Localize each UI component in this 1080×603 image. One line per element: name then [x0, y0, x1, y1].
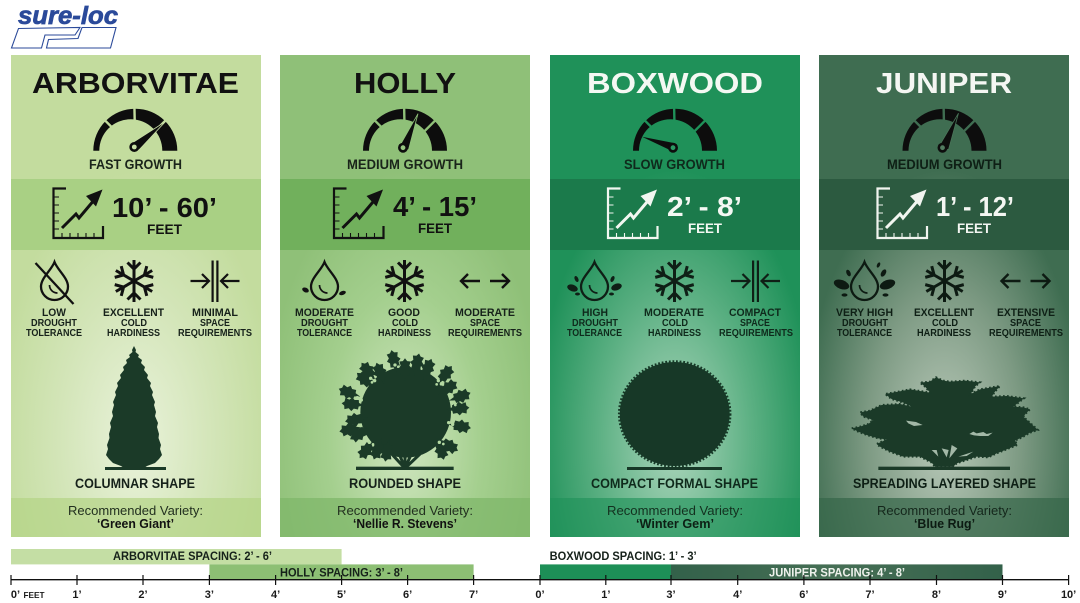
- height band: [11, 179, 261, 250]
- icon: height chart: [608, 188, 658, 238]
- variety band: [550, 498, 800, 537]
- heading: JUNIPER: [876, 68, 1012, 100]
- panel: arborvitae: [11, 55, 261, 537]
- spacing scale axis: 7’: [469, 589, 478, 601]
- shape label: COMPACT FORMAL SHAPE: [591, 476, 758, 491]
- growth label: SLOW GROWTH: [624, 157, 725, 172]
- drought label: TOLERANCE: [837, 328, 892, 339]
- panel: boxwood: [550, 55, 800, 537]
- icon: height chart: [878, 188, 927, 238]
- icon: very high drought: [832, 262, 897, 300]
- variety: ‘Winter Gem’: [636, 517, 714, 531]
- variety: [607, 504, 743, 531]
- silhouette: boxwood ball: [619, 362, 730, 470]
- spacing bar: arborvitae: ARBORVITAE SPACING: 2’ - 6’: [113, 551, 272, 563]
- space label: REQUIREMENTS: [178, 328, 252, 339]
- drought label: VERY HIGH: [836, 307, 893, 319]
- growth label: MEDIUM GROWTH: [887, 157, 1002, 172]
- icon: compact space: [731, 260, 780, 302]
- icon: low drought: [36, 262, 74, 304]
- cold label: HARDINESS: [107, 328, 160, 339]
- spacing scale axis: 3’: [205, 589, 214, 601]
- variety: [337, 504, 473, 531]
- variety: [68, 504, 203, 531]
- drought label: TOLERANCE: [26, 328, 82, 339]
- variety: ‘Green Giant’: [97, 517, 174, 531]
- spacing scale axis: 1’: [72, 589, 82, 601]
- space label: MINIMAL: [192, 307, 238, 319]
- silhouette: holly shrub: [336, 349, 473, 470]
- shape label: COLUMNAR SHAPE: [75, 476, 195, 491]
- variety: Recommended Variety:: [68, 504, 203, 518]
- gauge: slow growth: [633, 109, 717, 153]
- space label: MODERATE: [455, 307, 515, 319]
- space label: SPACE: [200, 318, 230, 329]
- variety band: [280, 498, 530, 537]
- icon: height chart: [54, 188, 103, 238]
- spacing scale axis: 6’: [403, 589, 412, 601]
- spacing scale axis: 4’: [271, 589, 280, 601]
- icon: moderate drought: [301, 262, 346, 300]
- icon: snowflake: [923, 260, 966, 302]
- gauge: fast growth: [93, 109, 177, 152]
- drought label: TOLERANCE: [567, 328, 622, 339]
- silhouette: columnar tree: [105, 346, 166, 470]
- cold label: EXCELLENT: [103, 307, 164, 319]
- spacing scale axis: 8’: [932, 589, 941, 601]
- space label: COMPACT: [729, 307, 781, 319]
- heading: BOXWOOD: [587, 68, 763, 100]
- cold label: [644, 307, 704, 339]
- spacing bar: juniper: JUNIPER SPACING: 4’ - 8’: [769, 568, 905, 580]
- height range: 10’ - 60’: [112, 192, 217, 223]
- cold label: [103, 307, 164, 339]
- spacing scale axis: 2’: [138, 589, 148, 601]
- spacing scale axis: 10’: [1061, 589, 1076, 601]
- space label: [178, 307, 252, 339]
- icon: extensive space: [1002, 274, 1050, 288]
- drought label: [836, 307, 893, 339]
- spacing bar: boxwood: [540, 551, 697, 579]
- spacing scale axis: 5’: [337, 589, 346, 601]
- drought label: [567, 307, 622, 339]
- spacing scale axis: [11, 575, 1076, 601]
- height unit: FEET: [418, 221, 453, 236]
- height range: 2’ - 8’: [667, 191, 742, 222]
- drought label: DROUGHT: [572, 318, 618, 329]
- drought label: [26, 307, 82, 339]
- cold label: HARDINESS: [917, 328, 971, 339]
- icon: moderate space: [461, 274, 509, 288]
- space label: REQUIREMENTS: [448, 328, 522, 339]
- spacing bar: juniper: [671, 564, 1002, 580]
- logo: sure-loc: sure-loc: [18, 2, 118, 30]
- cold label: COLD: [121, 318, 147, 329]
- variety: ‘Blue Rug’: [914, 517, 975, 531]
- height band: [819, 179, 1069, 250]
- space label: [448, 307, 522, 339]
- gauge: medium growth: [902, 109, 986, 153]
- heading: ARBORVITAE: [32, 68, 239, 100]
- cold label: COLD: [662, 318, 688, 329]
- growth label: FAST GROWTH: [89, 157, 182, 172]
- spacing scale axis: 4’: [733, 589, 742, 601]
- variety: [877, 504, 1012, 531]
- height band: [280, 179, 530, 250]
- spacing scale axis: 1’: [601, 589, 610, 601]
- cold label: HARDINESS: [378, 328, 431, 339]
- height unit: FEET: [957, 221, 992, 236]
- height unit: FEET: [147, 222, 183, 237]
- drought label: MODERATE: [295, 307, 354, 319]
- spacing scale axis: 6’: [799, 589, 808, 601]
- height band: [550, 179, 800, 250]
- shape label: ROUNDED SHAPE: [349, 476, 461, 491]
- variety band: [11, 498, 261, 537]
- drought label: LOW: [42, 307, 67, 319]
- spacing bar: holly: HOLLY SPACING: 3’ - 8’: [280, 568, 403, 580]
- space label: SPACE: [470, 318, 500, 329]
- space label: REQUIREMENTS: [719, 328, 793, 339]
- cold label: HARDINESS: [648, 328, 701, 339]
- panel: juniper: [819, 55, 1069, 537]
- height range: 1’ - 12’: [936, 191, 1014, 222]
- height unit: FEET: [688, 221, 723, 236]
- logo: sure-loc: [12, 2, 118, 48]
- spacing scale axis: 0’: [11, 589, 20, 601]
- variety band: [819, 498, 1069, 537]
- space label: REQUIREMENTS: [989, 328, 1063, 339]
- icon: snowflake: [383, 260, 426, 302]
- spacing bar: arborvitae: [11, 549, 342, 564]
- drought label: DROUGHT: [301, 318, 348, 329]
- space label: [719, 307, 793, 339]
- icon: snowflake: [113, 260, 155, 302]
- cold label: COLD: [932, 318, 958, 329]
- panel: holly: [280, 55, 530, 537]
- variety: Recommended Variety:: [607, 504, 743, 518]
- icon: minimal space: [190, 260, 240, 302]
- icon: height chart: [334, 188, 384, 238]
- cold label: EXCELLENT: [914, 307, 974, 319]
- cold label: GOOD: [388, 307, 420, 319]
- space label: SPACE: [1010, 318, 1041, 329]
- variety: ‘Nellie R. Stevens’: [353, 517, 457, 531]
- shape label: SPREADING LAYERED SHAPE: [853, 476, 1036, 491]
- gauge: medium growth: [363, 109, 447, 153]
- spacing bar: holly: [209, 564, 474, 580]
- icon: snowflake: [653, 260, 696, 302]
- variety: Recommended Variety:: [337, 504, 473, 518]
- spacing scale axis: 3’: [666, 589, 676, 601]
- drought label: TOLERANCE: [297, 328, 352, 339]
- drought label: DROUGHT: [31, 318, 77, 329]
- cold label: COLD: [392, 318, 418, 329]
- growth label: MEDIUM GROWTH: [347, 157, 463, 172]
- variety: Recommended Variety:: [877, 504, 1012, 518]
- icon: high drought: [566, 262, 623, 300]
- drought label: [295, 307, 354, 339]
- drought label: DROUGHT: [842, 318, 888, 329]
- space label: EXTENSIVE: [997, 307, 1055, 319]
- heading: HOLLY: [354, 68, 456, 100]
- space label: SPACE: [740, 318, 770, 329]
- drought label: HIGH: [582, 307, 608, 319]
- spacing scale axis: FEET: [24, 590, 45, 600]
- spacing scale axis: 7’: [865, 589, 875, 601]
- cold label: [914, 307, 974, 339]
- spacing scale axis: 9’: [998, 589, 1007, 601]
- spacing bar: boxwood: BOXWOOD SPACING: 1’ - 3’: [550, 551, 697, 563]
- silhouette: spreading juniper: [852, 377, 1038, 470]
- space label: [989, 307, 1063, 339]
- cold label: MODERATE: [644, 307, 704, 319]
- spacing scale axis: 0’: [535, 589, 545, 601]
- height range: 4’ - 15’: [393, 191, 477, 222]
- cold label: [378, 307, 431, 339]
